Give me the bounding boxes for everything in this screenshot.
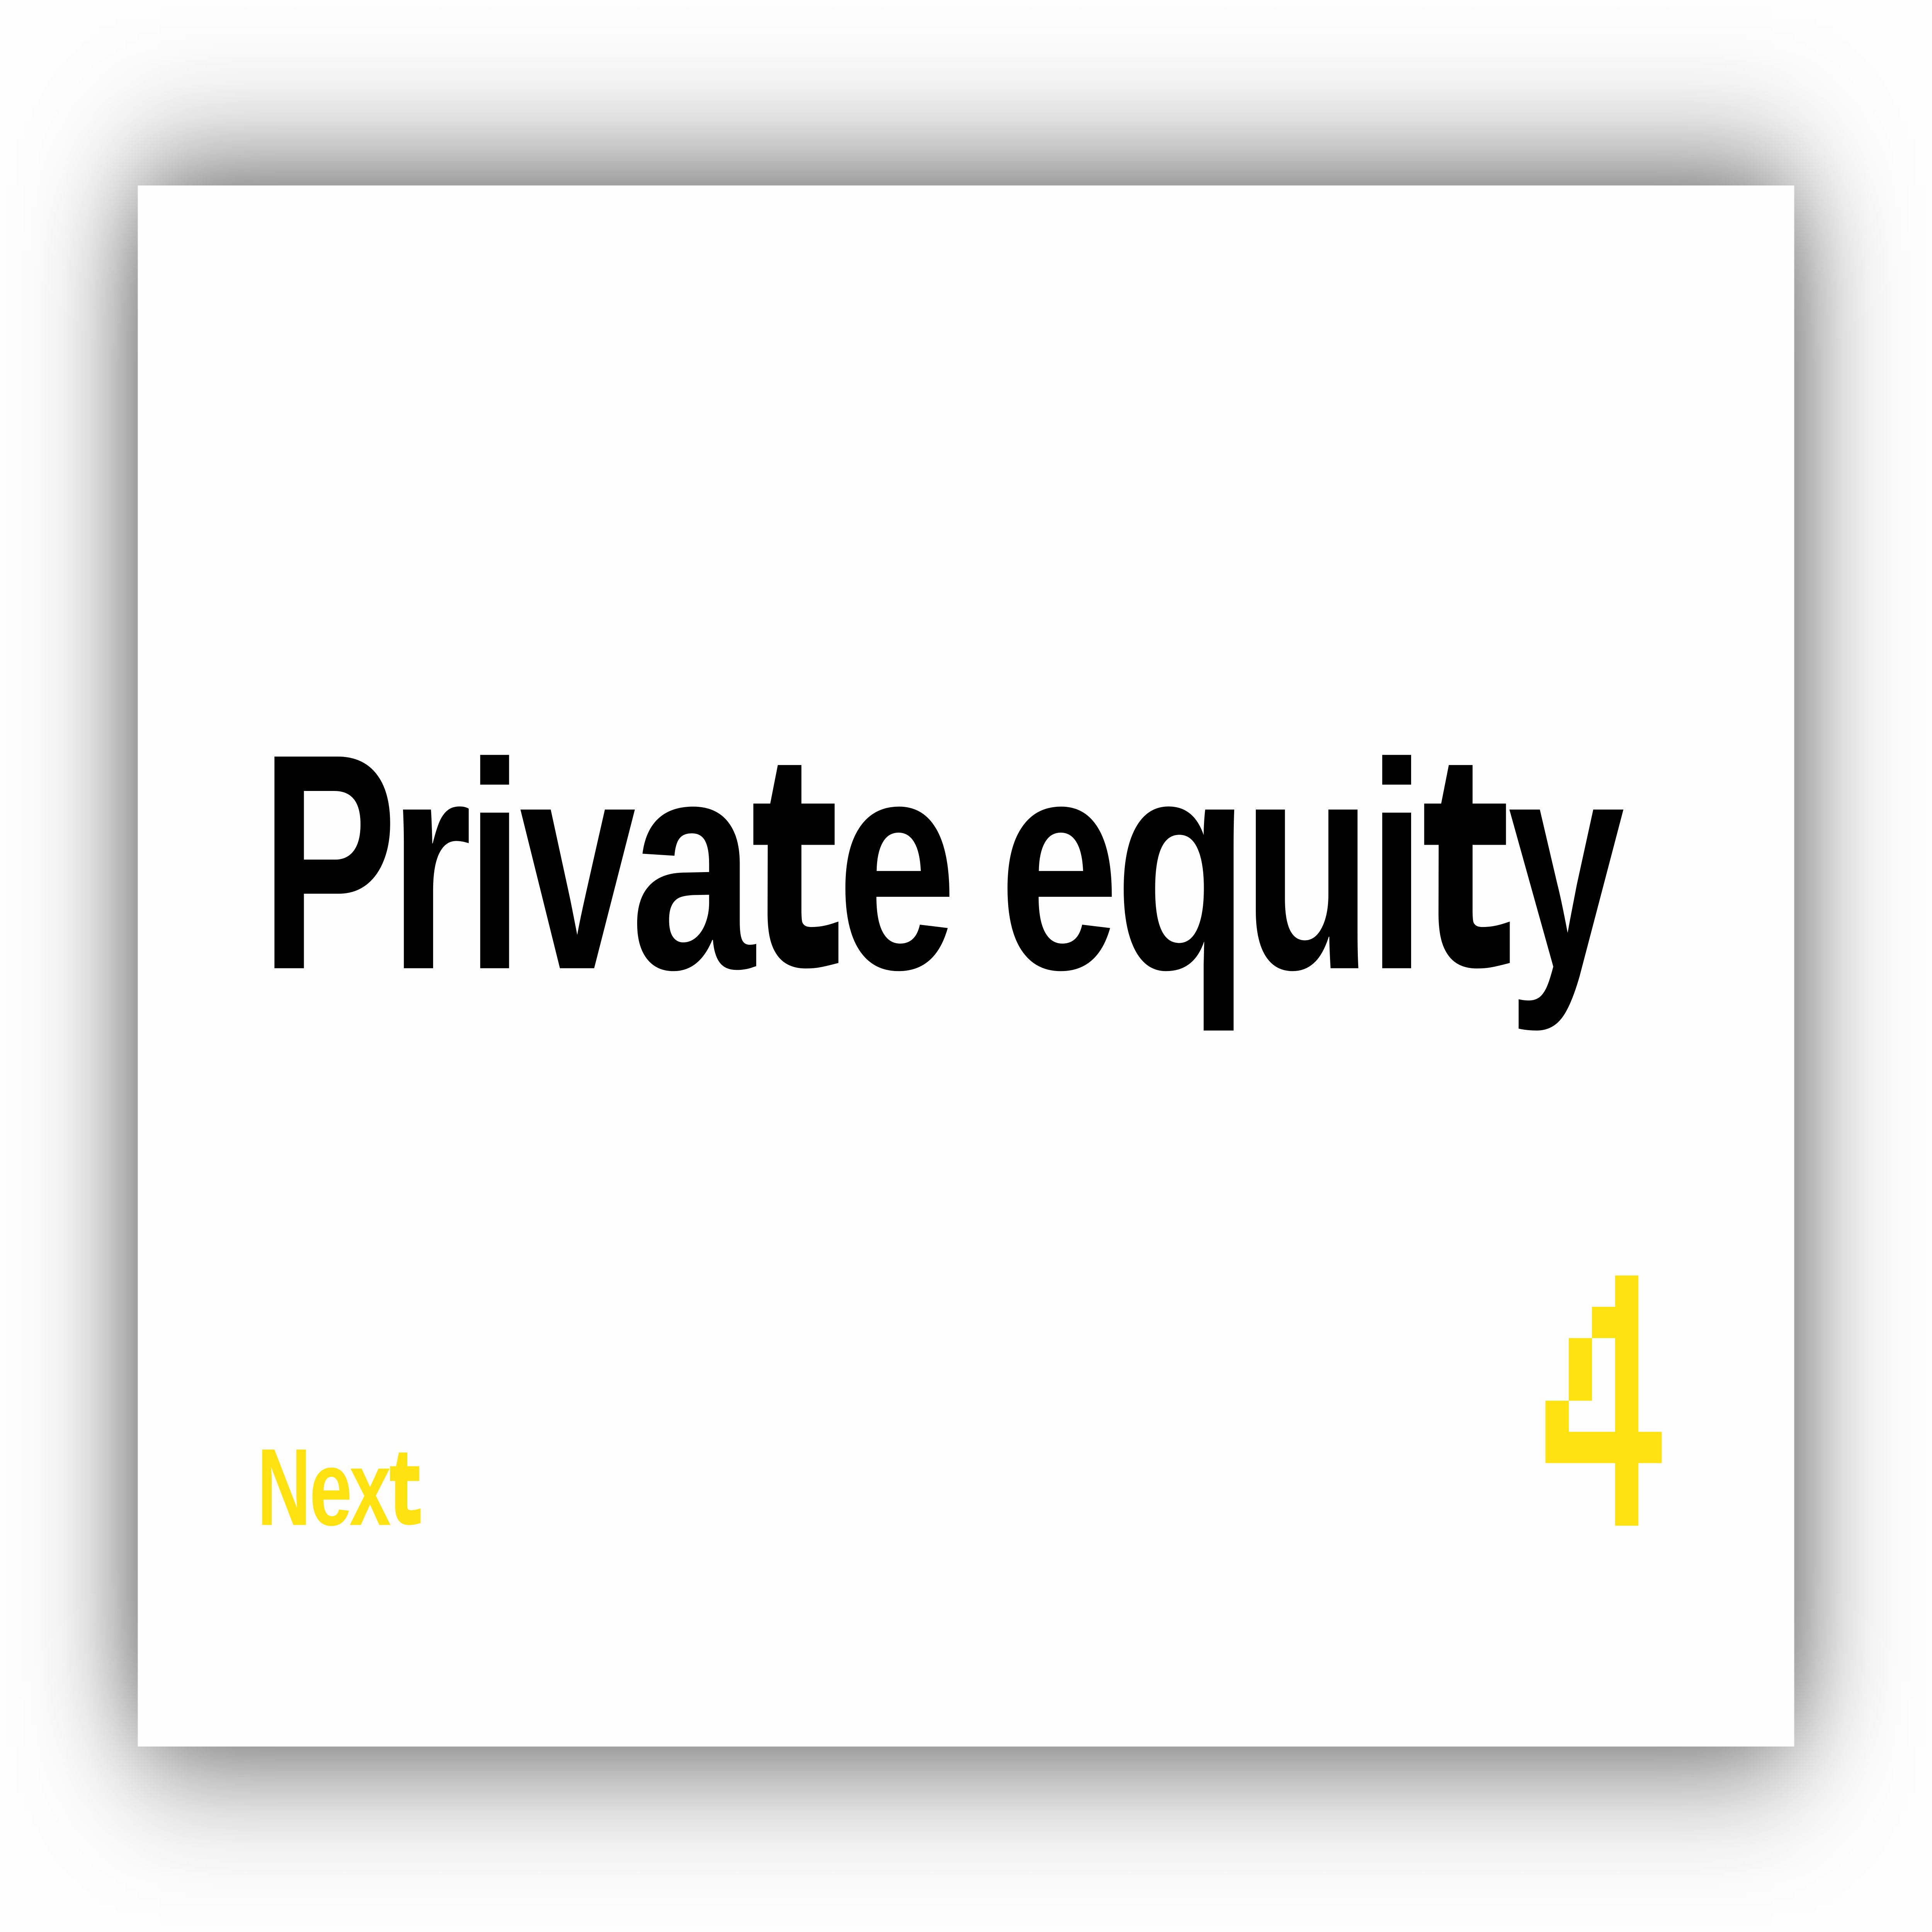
title: Private equity [261, 690, 1626, 1043]
title: Private equity: i [1367, 702, 1426, 1031]
title: Private equity: y [1508, 697, 1626, 1034]
title: Private equity: e [999, 697, 1119, 1032]
title: Private equity: a [631, 697, 756, 1032]
title: Private equity: v [520, 696, 637, 1032]
title: Private equity: i [466, 702, 524, 1031]
title: Private equity: q [1115, 697, 1249, 1034]
title: Private equity: r [389, 696, 472, 1032]
title: Private equity: u [1243, 697, 1372, 1032]
label: Next: t [387, 1439, 425, 1552]
title: Private equity: P [261, 690, 397, 1034]
icon: pixel numeral four [1546, 1276, 1662, 1526]
title: Private equity: e [837, 697, 957, 1032]
panel: white card [138, 185, 1794, 1747]
title: Private equity: t [1415, 726, 1522, 1043]
title: Private equity: t [744, 726, 850, 1043]
label: Next: e [310, 1428, 352, 1548]
label: Next: x [349, 1429, 391, 1548]
label: Next [257, 1426, 425, 1552]
label: Next: N [257, 1426, 311, 1549]
